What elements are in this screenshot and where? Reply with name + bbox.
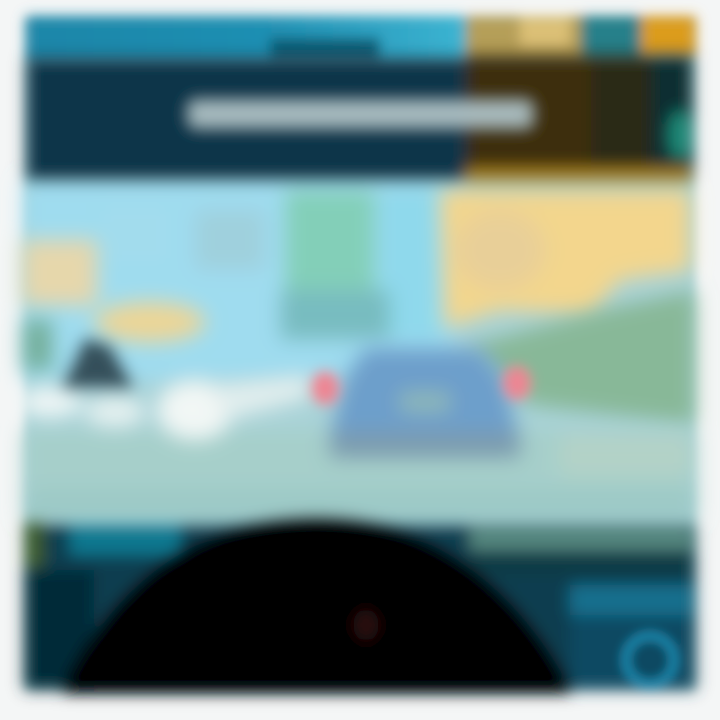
header: dark title band <box>26 55 693 182</box>
dashboard <box>24 522 696 690</box>
header: top teal strip <box>26 16 696 60</box>
header panel <box>26 16 696 182</box>
white vehicle on the left <box>18 375 310 440</box>
red dashboard indicator <box>353 609 379 641</box>
dark mountain silhouette <box>62 338 134 388</box>
blue car <box>311 348 531 458</box>
panel: sky <box>24 180 454 380</box>
right tail light <box>503 366 531 400</box>
panel: sand-coloured clouds <box>22 190 690 342</box>
panel: road <box>24 430 696 520</box>
icon: gauge ring, lower right <box>626 636 674 684</box>
steering wheel silhouette <box>62 518 572 692</box>
title: illegible heading shown as a light bar <box>188 100 533 128</box>
left tail light <box>311 371 339 405</box>
panel: green roadside <box>24 290 695 425</box>
car body <box>330 348 520 458</box>
